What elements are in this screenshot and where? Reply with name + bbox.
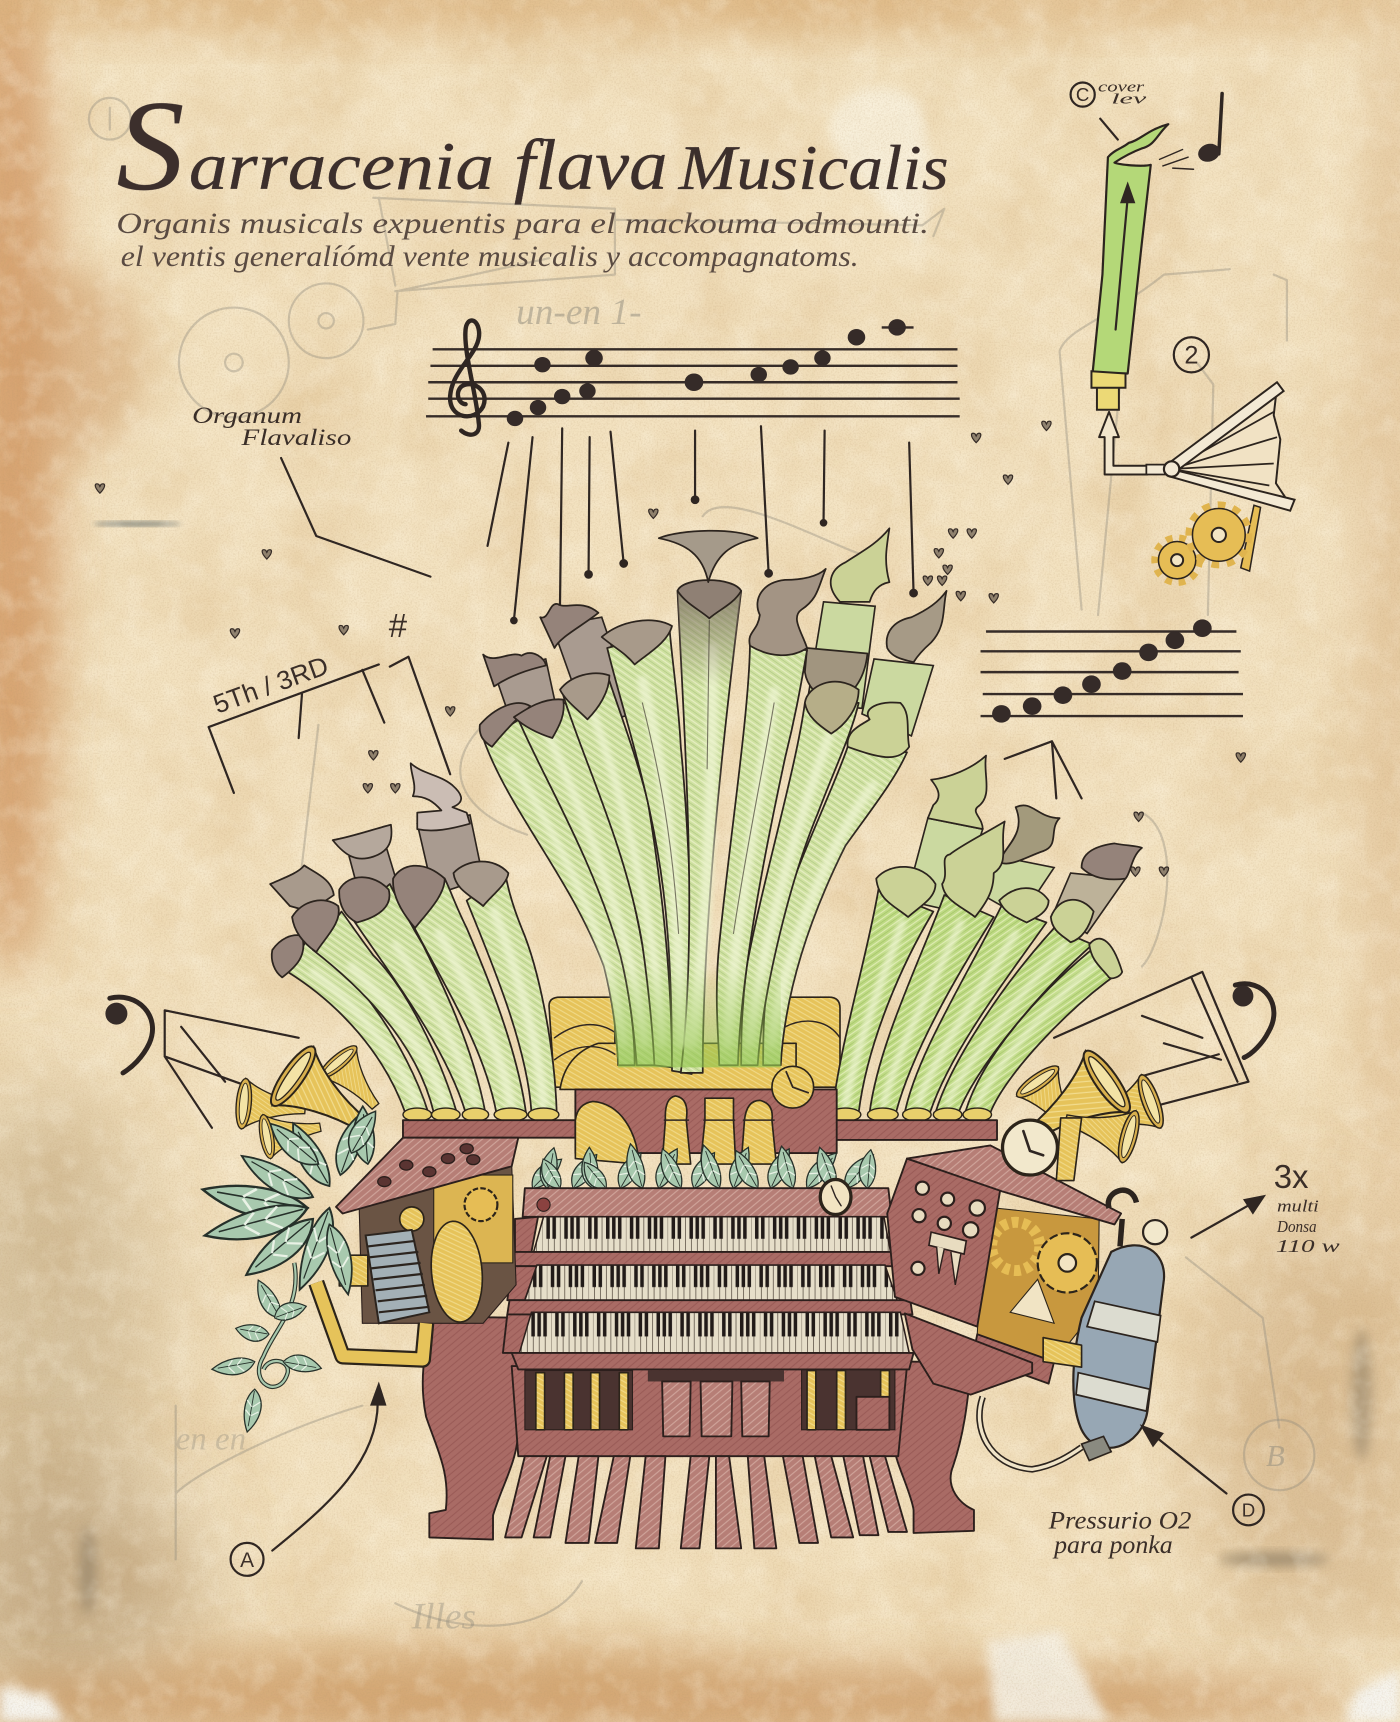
power note with arrow: 110 w <box>1276 1236 1340 1256</box>
right slab <box>907 1145 1121 1224</box>
pedalboard <box>505 1456 907 1548</box>
callout A with arrow <box>231 1381 387 1576</box>
hoods <box>270 862 508 977</box>
pressure note <box>1048 1507 1192 1559</box>
right leg <box>895 1362 974 1533</box>
pitcher mouths <box>480 531 909 757</box>
top shelves <box>403 1089 997 1153</box>
music staff two <box>981 619 1243 798</box>
coil bellows <box>366 1230 429 1323</box>
power note with arrow <box>1191 1158 1340 1256</box>
leftmost tube <box>288 939 428 1112</box>
right desk <box>905 1313 1032 1395</box>
back pitcher left: tall <box>540 604 635 725</box>
leaves and vine at left <box>200 1106 382 1434</box>
organ console <box>316 1066 1121 1548</box>
back pitcher right: tall with spike hood <box>807 528 889 708</box>
left pitcher group <box>270 763 557 1112</box>
pressure gauge <box>400 1207 424 1231</box>
small brass tube <box>1056 1118 1082 1181</box>
bracket diagram: 5th / 3rd: 5Th / 3RD <box>209 650 332 720</box>
pressure note: para ponka <box>1052 1531 1173 1559</box>
gold pipe and columns <box>575 1096 776 1164</box>
bass clef left with diagram lines <box>105 997 299 1128</box>
label: Organum Flavaliso with pointer: Flavaliso <box>240 424 351 450</box>
top strip with clock <box>523 1179 892 1217</box>
quarter note with sound lines <box>1160 93 1222 169</box>
nozzle <box>1082 1436 1111 1461</box>
tube R3 <box>905 906 1046 1112</box>
tube three <box>351 884 485 1112</box>
right baluster bay <box>802 1367 895 1430</box>
cavity <box>359 1164 516 1323</box>
pitcher tube 1 <box>484 719 635 1065</box>
central pitcher fan <box>480 528 947 1074</box>
top right diagram: single pitcher airflow <box>1071 79 1295 582</box>
title: flava <box>514 124 668 205</box>
back pitcher right: spiked grey <box>862 591 947 736</box>
flow arrow in tube <box>1116 181 1135 330</box>
brass joint <box>1043 1338 1082 1367</box>
subtitle handwriting: Organis musicals expuentis para el mackouma odmounti. <box>116 208 929 240</box>
subtitle handwriting <box>116 208 929 273</box>
tube R1 <box>832 890 933 1112</box>
callout C: C <box>1076 84 1089 105</box>
notes <box>507 319 914 426</box>
pitcher tube 7 <box>741 703 859 1065</box>
left horns <box>234 1041 394 1160</box>
callout A with arrow: A <box>240 1549 254 1572</box>
back pitcher right: middle mouth <box>805 648 867 705</box>
pitcher tube 6 <box>717 646 807 1065</box>
tube highlights <box>845 922 1098 1104</box>
tube five <box>467 873 557 1112</box>
green tube <box>1093 124 1168 373</box>
callout 2 <box>1174 337 1209 372</box>
power note with arrow: Donsa <box>1276 1217 1317 1236</box>
faint pencil sketches: un-en 1- <box>516 292 642 333</box>
pressure note: Pressurio O2 <box>1048 1507 1192 1535</box>
bracket diagram: 5th / 3rd <box>209 607 450 793</box>
gears <box>1155 505 1261 582</box>
label: Organum Flavaliso with pointer: Organum <box>192 402 302 428</box>
pointer lines from staff to pitcher mouths <box>488 426 917 623</box>
callout 2: 2 <box>1184 342 1198 370</box>
oxygen tank, hose and valves <box>979 1190 1167 1469</box>
pitcher tube 2 <box>516 703 654 1065</box>
grey top shading on centre tube <box>677 591 741 686</box>
hoods <box>876 821 1122 978</box>
slab <box>336 1138 518 1213</box>
right horns <box>1011 1045 1168 1164</box>
valve top <box>1108 1190 1136 1246</box>
tube R2 <box>870 895 994 1112</box>
manual one <box>512 1217 903 1266</box>
clock right <box>1003 1120 1057 1175</box>
back pitcher with spike <box>411 763 483 895</box>
title: Musicalis <box>677 132 949 203</box>
yellow tank <box>427 1219 486 1324</box>
collar <box>1091 371 1125 410</box>
tank body <box>1073 1245 1164 1448</box>
faint pencil sketches: B <box>1266 1439 1285 1473</box>
fine centre lines <box>642 621 774 933</box>
pitcher tube 3 <box>562 681 672 1067</box>
bellows fan <box>1146 382 1295 511</box>
callout D with arrow: D <box>1242 1500 1255 1521</box>
treble clef <box>450 320 485 435</box>
label plate <box>339 1255 368 1286</box>
title: arracenia <box>189 128 494 204</box>
tube four <box>412 879 526 1112</box>
tube R4 <box>936 928 1093 1112</box>
side pipe <box>316 1283 426 1360</box>
left leg and cheek <box>423 1317 525 1540</box>
lower panel <box>512 1366 907 1456</box>
right gear box <box>973 1207 1099 1384</box>
back pitcher left: hooded dark <box>483 653 560 736</box>
callout C: cover <box>1098 79 1145 95</box>
music staff one <box>426 319 960 435</box>
manual two <box>507 1265 912 1314</box>
callout C: lev <box>1111 91 1148 107</box>
bracket diagram: 5th / 3rd: # <box>389 607 408 644</box>
flies <box>95 421 1245 876</box>
back pitcher right <box>1054 843 1142 933</box>
back pitcher with spike <box>906 756 987 912</box>
small gauge <box>1143 1220 1167 1244</box>
middle pedals trio <box>648 1370 784 1436</box>
tube two <box>313 912 457 1112</box>
leaf row <box>526 1142 878 1194</box>
faint pencil sketches: Illes <box>411 1597 476 1638</box>
tank straps <box>1076 1301 1161 1411</box>
right pitcher group <box>832 756 1142 1112</box>
faint pencil sketches: en en <box>176 1422 246 1458</box>
power note with arrow: multi <box>1277 1196 1319 1215</box>
gold gear panel <box>434 1175 513 1263</box>
gold ferrule row <box>403 1108 992 1121</box>
pitcher tube centre <box>677 591 741 1073</box>
subtitle handwriting: el ventis generalíómd vente musicalis y accompagnatoms. <box>121 241 859 273</box>
lower air arrow <box>1099 412 1147 474</box>
hose <box>979 1397 1082 1469</box>
callout D with arrow <box>1140 1424 1264 1525</box>
back pitcher curly <box>983 805 1060 917</box>
callout C <box>1071 79 1148 140</box>
manual three <box>503 1312 914 1369</box>
pitcher tube 4 <box>607 632 692 1074</box>
title: S <box>116 75 184 218</box>
left baluster bay <box>525 1370 632 1430</box>
bass clef right with diagram lines <box>1054 972 1274 1115</box>
left console slab and machinery <box>316 1138 518 1360</box>
tube highlights <box>313 912 544 1104</box>
pitcher tube 8 <box>763 747 907 1065</box>
tube highlights <box>511 648 873 1043</box>
saturated green base shading <box>607 966 781 1067</box>
back pitcher lighter <box>333 825 401 906</box>
clock on chest <box>772 1066 814 1108</box>
label: Organum Flavaliso with pointer <box>192 402 430 577</box>
right panel with stops <box>887 1159 1000 1327</box>
golden wind chest behind the pitchers <box>549 997 840 1089</box>
tube R5 <box>965 944 1120 1112</box>
faint pencil sketches <box>89 98 1314 1638</box>
power note with arrow: 3x <box>1274 1158 1309 1195</box>
